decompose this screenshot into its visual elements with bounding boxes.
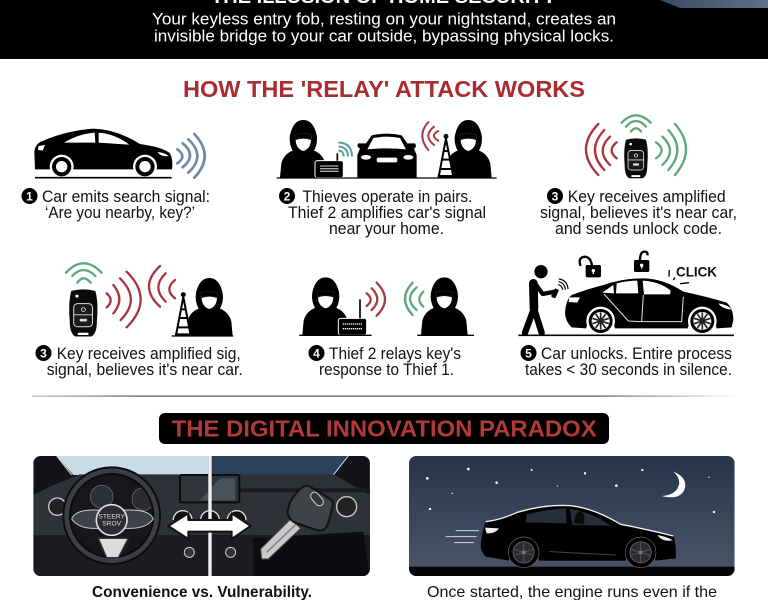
step 4 text: 4 (313, 346, 320, 360)
panel: step 4 (299, 277, 474, 379)
header band (0, 0, 768, 59)
heading: how the relay attack works: HOW THE 'RELAY' ATTACK WORKS (183, 76, 585, 102)
step 4 text: response to Thief 1. (319, 361, 454, 379)
icon: thieves, car, router and tower (277, 120, 497, 178)
step 3 continued text (36, 345, 243, 379)
panel: step 5 (518, 252, 734, 379)
step 2 text: Thieves operate in pairs. (302, 188, 472, 206)
step 2 text: Thief 2 amplifies car's signal (288, 204, 486, 222)
header description: invisible bridge to your car outside, bypassing physical locks. (154, 26, 614, 46)
step 5 text: takes < 30 seconds in silence. (525, 361, 732, 379)
panel: step 3 (540, 115, 737, 238)
panel: step 3 continued (36, 263, 243, 379)
heading: the digital innovation paradox: THE DIGITAL INNOVATION PARADOX (172, 416, 597, 442)
illustration: car driving at night (409, 456, 735, 576)
panel: convenience vs vulnerability (33, 456, 370, 600)
illustration: car dashboard and key: STEERY (98, 514, 125, 521)
icon: car emitting signal (34, 129, 205, 179)
icon: key fob receiving signal (586, 115, 686, 178)
step 5 text (520, 345, 732, 379)
step 1 text: ‘Are you nearby, key?’ (45, 204, 195, 222)
panel: step 2 (277, 120, 497, 238)
step 2 text: near your home. (329, 220, 444, 238)
panel: engine keeps running (409, 456, 735, 600)
step 4 text (308, 345, 461, 379)
header description: Your keyless entry fob, resting on your nightstand, creates an (152, 10, 616, 28)
step 5 text: 5 (525, 346, 532, 360)
step 1 text (22, 188, 210, 222)
step 3 continued text: 3 (40, 346, 47, 360)
illustration: car dashboard and key (33, 456, 370, 576)
step 5 text: Car unlocks. Entire process (541, 345, 732, 363)
step 3 continued text: signal, believes it's near car. (47, 361, 243, 379)
step 2 text (279, 188, 486, 238)
step 3 text: and sends unlock code. (555, 220, 722, 238)
illustration: car dashboard and key: SROV (102, 521, 122, 528)
step 3 text: signal, believes it's near car, (540, 204, 737, 222)
step 1 text: Car emits search signal: (42, 188, 210, 206)
step 4 text: Thief 2 relays key's (329, 345, 461, 363)
step 3 text (540, 188, 737, 238)
step 3 continued text: Key receives amplified sig, (57, 345, 241, 363)
step 3 text: 3 (552, 190, 559, 204)
step 2 text: 2 (284, 190, 291, 204)
icon: thieves relaying response (299, 277, 474, 335)
icon: person unlocking car with click (518, 252, 734, 335)
header description (152, 10, 616, 46)
icon: open padlock (634, 252, 649, 272)
icon: open padlock (580, 257, 601, 277)
click label: CLICK (676, 265, 717, 280)
panel: step 1 (22, 129, 210, 222)
icon: key fob, amplified signal, tower and thief (66, 263, 233, 336)
step 1 text: 1 (26, 190, 33, 204)
step 3 text: Key receives amplified (568, 188, 726, 206)
